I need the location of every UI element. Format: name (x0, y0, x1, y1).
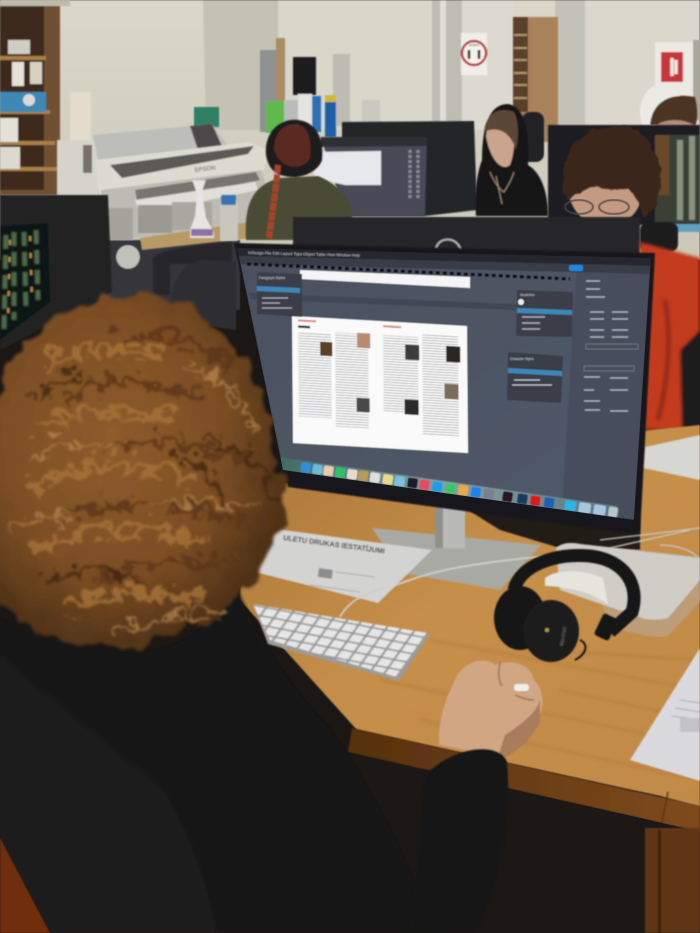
left printed handout (255, 527, 432, 603)
cables behind mac mini (600, 528, 700, 560)
front student's black jacket (0, 590, 432, 933)
chair backs in the middle (116, 222, 678, 330)
horizontal shade band (250, 294, 516, 310)
monitor stand (372, 505, 541, 590)
background wall (0, 0, 700, 260)
left monitor (0, 195, 112, 350)
swatches panel (516, 290, 573, 337)
document spread (292, 316, 468, 453)
front student's sleeve (410, 749, 508, 933)
paragraph styles panel (257, 272, 302, 317)
front student's chair (0, 655, 218, 933)
character styles panel (507, 352, 563, 403)
main monitor (234, 243, 655, 535)
white strip at top of page (300, 270, 470, 288)
thumbnail photos (320, 331, 461, 418)
desk front edge (348, 728, 700, 832)
water bottle (220, 195, 238, 241)
desk leg (645, 828, 700, 933)
screen contents (237, 248, 651, 521)
hair curls (5, 327, 265, 620)
dark floor behind front row (100, 240, 240, 310)
large format Epson printer (57, 92, 268, 240)
swatches panel: Swatches (520, 293, 535, 297)
bookshelf (0, 0, 70, 195)
left printed handout: ULETU DRUKAS IESTATĪJUMI (283, 533, 385, 556)
publish button (569, 265, 583, 271)
spray bottle (190, 180, 214, 238)
hand on mouse (439, 660, 542, 760)
third text column (383, 325, 419, 413)
door sign: keep distance: IEVĒRO (469, 43, 480, 47)
paper on the desk right top (643, 435, 700, 480)
desk surface (240, 425, 700, 807)
wooden cabinet in the distance (513, 17, 558, 142)
dark dashes ruler (247, 264, 570, 279)
paragraph styles panel: Paragraph Styles (259, 276, 285, 280)
under-desk shadow and floor (345, 752, 700, 933)
right printed paper (630, 648, 700, 781)
monitor screen (237, 248, 651, 521)
fourth text column (422, 333, 459, 437)
orange corner at bottom left (0, 838, 50, 933)
first text column (298, 319, 332, 418)
poster rolls and materials (260, 38, 380, 137)
second text column (335, 332, 369, 428)
back screen with design app (314, 137, 427, 216)
properties sidebar controls (584, 281, 638, 411)
black Marshall headphones: Marshall (559, 627, 568, 646)
glasses (565, 200, 629, 214)
student in black hood (475, 104, 548, 216)
fire extinguisher sign (655, 40, 700, 120)
menu bar text: InDesign File Edit Layout Type Object Table View Window Help (248, 250, 361, 258)
large format Epson printer: EPSON (195, 165, 216, 174)
second row monitor back (293, 217, 640, 256)
menu bar (237, 248, 651, 266)
small desk behind printer (140, 222, 252, 250)
dock bar (276, 457, 619, 521)
hair mass (0, 295, 285, 647)
keyboard (253, 604, 430, 681)
right properties sidebar (562, 256, 651, 520)
monitor bezel (234, 243, 655, 535)
door sign: keep distance (461, 33, 487, 75)
tab bar (237, 256, 651, 274)
mac mini (545, 543, 700, 637)
wood grain (380, 640, 700, 780)
face (566, 175, 644, 226)
gap behind monitor (460, 505, 640, 550)
back monitor: right with tree photo (548, 125, 700, 232)
desk fan and distant man (640, 84, 697, 140)
front student's curly hair (0, 295, 285, 647)
white cable (340, 555, 555, 617)
back monitor: centre (342, 121, 477, 216)
student in red sweater (640, 242, 700, 430)
student with red braid and headphones (246, 120, 352, 240)
student with glasses (562, 125, 661, 226)
black Marshall headphones (494, 556, 634, 662)
character styles panel: Character Styles (510, 357, 534, 361)
screen background (240, 264, 576, 498)
short dark hair (562, 125, 661, 216)
